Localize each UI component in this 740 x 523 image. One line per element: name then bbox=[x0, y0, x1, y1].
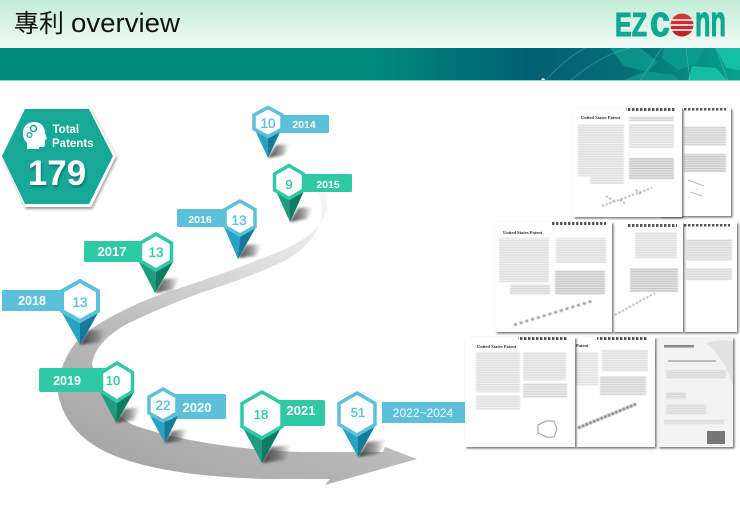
pin: 2017: 13 bbox=[148, 245, 164, 260]
logo: EZconn bbox=[615, 0, 726, 46]
pin: 2014: 10 bbox=[260, 116, 276, 131]
logo: EZconn: EZ bbox=[615, 6, 647, 43]
pin: 2020 bbox=[149, 389, 226, 443]
pin: 2015: 9 bbox=[285, 177, 293, 192]
pin: 2019: 2019 bbox=[53, 374, 81, 388]
pin: 2014: 2014 bbox=[292, 119, 316, 131]
pin: 2020: 22 bbox=[155, 398, 171, 413]
patent page: United States Patent bbox=[503, 230, 543, 235]
patent page bbox=[575, 337, 655, 447]
timeline road arrow bbox=[58, 163, 417, 485]
pin: 2022~2024: 2022~2024 bbox=[393, 406, 454, 420]
pin: 2016: 13 bbox=[231, 213, 247, 228]
patent documents: row 1 bbox=[573, 108, 731, 217]
title: overview bbox=[71, 8, 181, 38]
label: Total Patents: Patents bbox=[52, 138, 94, 150]
patent documents: row 2 bbox=[495, 222, 737, 332]
pin: 2016: 2016 bbox=[188, 214, 212, 226]
patent page: United States Patent bbox=[477, 344, 517, 349]
patent page: Patent bbox=[576, 343, 589, 348]
pin: 2017: 2017 bbox=[98, 244, 126, 259]
pin: 2016 bbox=[177, 201, 262, 259]
number: 179: 179 bbox=[28, 154, 86, 193]
patent page bbox=[495, 222, 612, 332]
pin: 2022~2024: 51 bbox=[351, 405, 365, 420]
patent page: front: United States Patent bbox=[581, 115, 621, 120]
pin: 2022~2024 bbox=[339, 393, 465, 457]
pin: 2021 bbox=[242, 392, 325, 463]
pin: 2015 bbox=[274, 166, 352, 222]
patent page: front bbox=[573, 108, 682, 217]
certificate page bbox=[658, 337, 733, 447]
label: Total Patents: Total bbox=[52, 124, 79, 136]
header background bbox=[0, 0, 740, 48]
pin: 2019 bbox=[39, 363, 141, 423]
patent page bbox=[465, 337, 575, 447]
pin: 2021: 2021 bbox=[287, 403, 315, 418]
patent page bbox=[612, 222, 683, 332]
pin: 2018: 13 bbox=[72, 295, 88, 310]
pin: 2018: 2018 bbox=[18, 294, 46, 308]
patent documents: row 3 bbox=[465, 337, 733, 447]
patent page bbox=[683, 222, 737, 332]
pin: 2021: 18 bbox=[254, 407, 268, 422]
pin: 2017 bbox=[84, 234, 180, 293]
pin: 2018 bbox=[2, 281, 107, 345]
total patents badge bbox=[2, 109, 116, 207]
patent page: back bbox=[660, 108, 731, 216]
pin: 2019: 10 bbox=[106, 373, 120, 388]
header band with world map bbox=[0, 48, 740, 82]
pin: 2020: 2020 bbox=[183, 400, 211, 415]
pin: 2014 bbox=[254, 108, 329, 158]
title: 專利 bbox=[14, 10, 64, 38]
pin: 2015: 2015 bbox=[316, 179, 340, 191]
icon: head with gears bbox=[23, 122, 47, 149]
